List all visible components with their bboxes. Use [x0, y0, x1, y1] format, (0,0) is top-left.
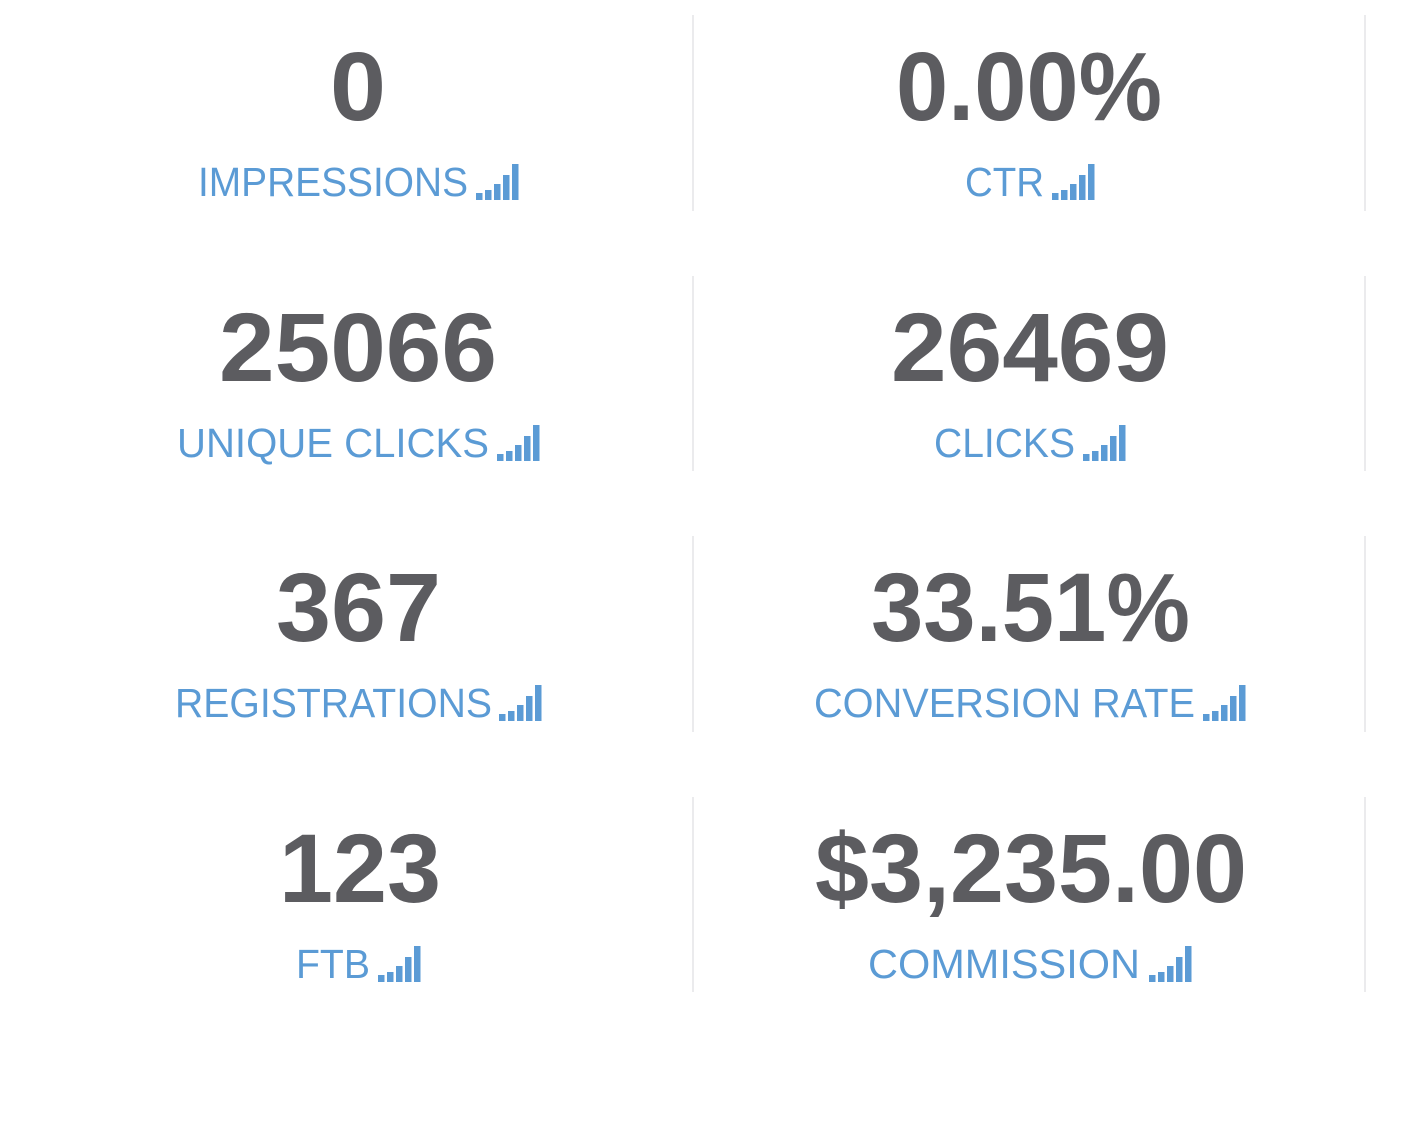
label: CTR — [965, 159, 1044, 205]
icon: bars — [476, 164, 518, 200]
label: CONVERSION RATE — [814, 680, 1195, 726]
metric: registrations — [175, 553, 542, 726]
icon: bars — [1083, 425, 1126, 461]
metric: commission — [815, 814, 1247, 987]
metric: ctr — [896, 32, 1162, 205]
value: 0.00% — [896, 32, 1162, 141]
value: 33.51% — [871, 553, 1190, 662]
value: 0 — [330, 32, 386, 141]
value: 123 — [279, 814, 441, 923]
value: 367 — [276, 553, 441, 662]
metric: ftb — [279, 814, 441, 987]
label: COMMISSION — [868, 941, 1140, 987]
icon: bars — [1052, 164, 1094, 200]
icon: bars — [499, 685, 542, 721]
value: 26469 — [891, 293, 1169, 402]
metric: impressions — [198, 32, 518, 205]
icon: bars — [1149, 946, 1192, 982]
label: CLICKS — [934, 420, 1075, 466]
icon: bars — [1203, 685, 1246, 721]
metric: unique clicks — [177, 293, 540, 466]
label: UNIQUE CLICKS — [177, 420, 489, 466]
value: $3,235.00 — [815, 814, 1247, 923]
metric: clicks — [891, 293, 1169, 466]
value: 25066 — [219, 293, 497, 402]
icon: bars — [378, 946, 420, 982]
label: FTB — [296, 941, 370, 987]
label: IMPRESSIONS — [198, 159, 468, 205]
metric: conversion rate — [814, 553, 1246, 726]
label: REGISTRATIONS — [175, 680, 492, 726]
icon: bars — [497, 425, 540, 461]
